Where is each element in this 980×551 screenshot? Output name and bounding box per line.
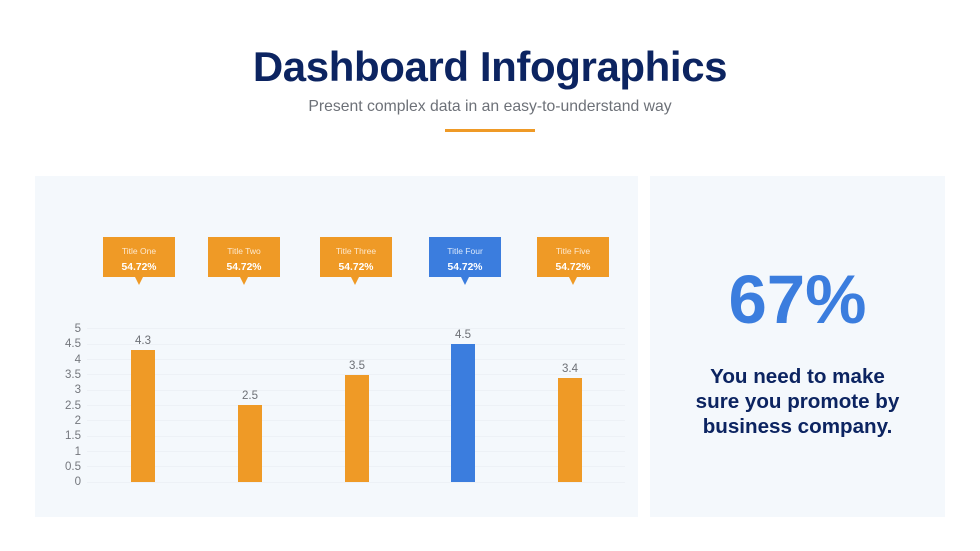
bar value labels: 2.5 xyxy=(242,390,258,402)
panel: statistic xyxy=(650,176,945,517)
callout: title three: 54.72% xyxy=(339,262,373,273)
statistic description: You need to make xyxy=(710,365,885,388)
panel: chart xyxy=(35,176,638,517)
y axis labels: 3 xyxy=(75,384,81,396)
bar value labels xyxy=(135,329,579,402)
callout: title one: 54.72% xyxy=(122,262,156,273)
big statistic: 67% xyxy=(728,261,867,338)
bar value labels: 4.5 xyxy=(455,329,471,341)
statistic description xyxy=(696,365,900,438)
statistic description: business company. xyxy=(703,415,892,438)
title: Dashboard Infographics xyxy=(253,43,727,90)
title underline xyxy=(445,129,535,132)
y axis labels: 3.5 xyxy=(65,369,81,381)
y axis labels: 1 xyxy=(75,446,81,458)
callout: title two: Title Two xyxy=(227,246,261,256)
y axis labels: 4.5 xyxy=(65,338,81,350)
callout: title two: 54.72% xyxy=(227,262,261,273)
callout: title five: Title Five xyxy=(556,246,590,256)
callout: title one xyxy=(103,237,175,285)
callout: title four: 54.72% xyxy=(448,262,482,273)
y axis labels: 2.5 xyxy=(65,400,81,412)
y axis labels xyxy=(65,323,82,488)
statistic description: sure you promote by xyxy=(696,390,899,413)
callout: title five: 54.72% xyxy=(556,262,590,273)
bar value labels: 3.4 xyxy=(562,363,579,375)
callout: title two xyxy=(208,237,280,285)
subtitle: Present complex data in an easy-to-understand way xyxy=(308,98,672,115)
callout: title three: Title Three xyxy=(336,246,376,256)
callout: title one: Title One xyxy=(122,246,156,256)
bar value labels: 3.5 xyxy=(349,360,365,372)
y axis labels: 2 xyxy=(75,415,81,427)
y axis labels: 0 xyxy=(75,476,81,488)
y axis labels: 0.5 xyxy=(65,461,81,473)
callout: title five xyxy=(537,237,609,285)
callout: title three xyxy=(320,237,392,285)
y axis labels: 5 xyxy=(75,323,81,335)
callout: title four: Title Four xyxy=(447,246,483,256)
bars xyxy=(131,344,582,482)
callout: title four xyxy=(429,237,501,285)
bar value labels: 4.3 xyxy=(135,335,151,347)
y axis labels: 4 xyxy=(75,354,82,366)
y axis labels: 1.5 xyxy=(65,430,81,442)
